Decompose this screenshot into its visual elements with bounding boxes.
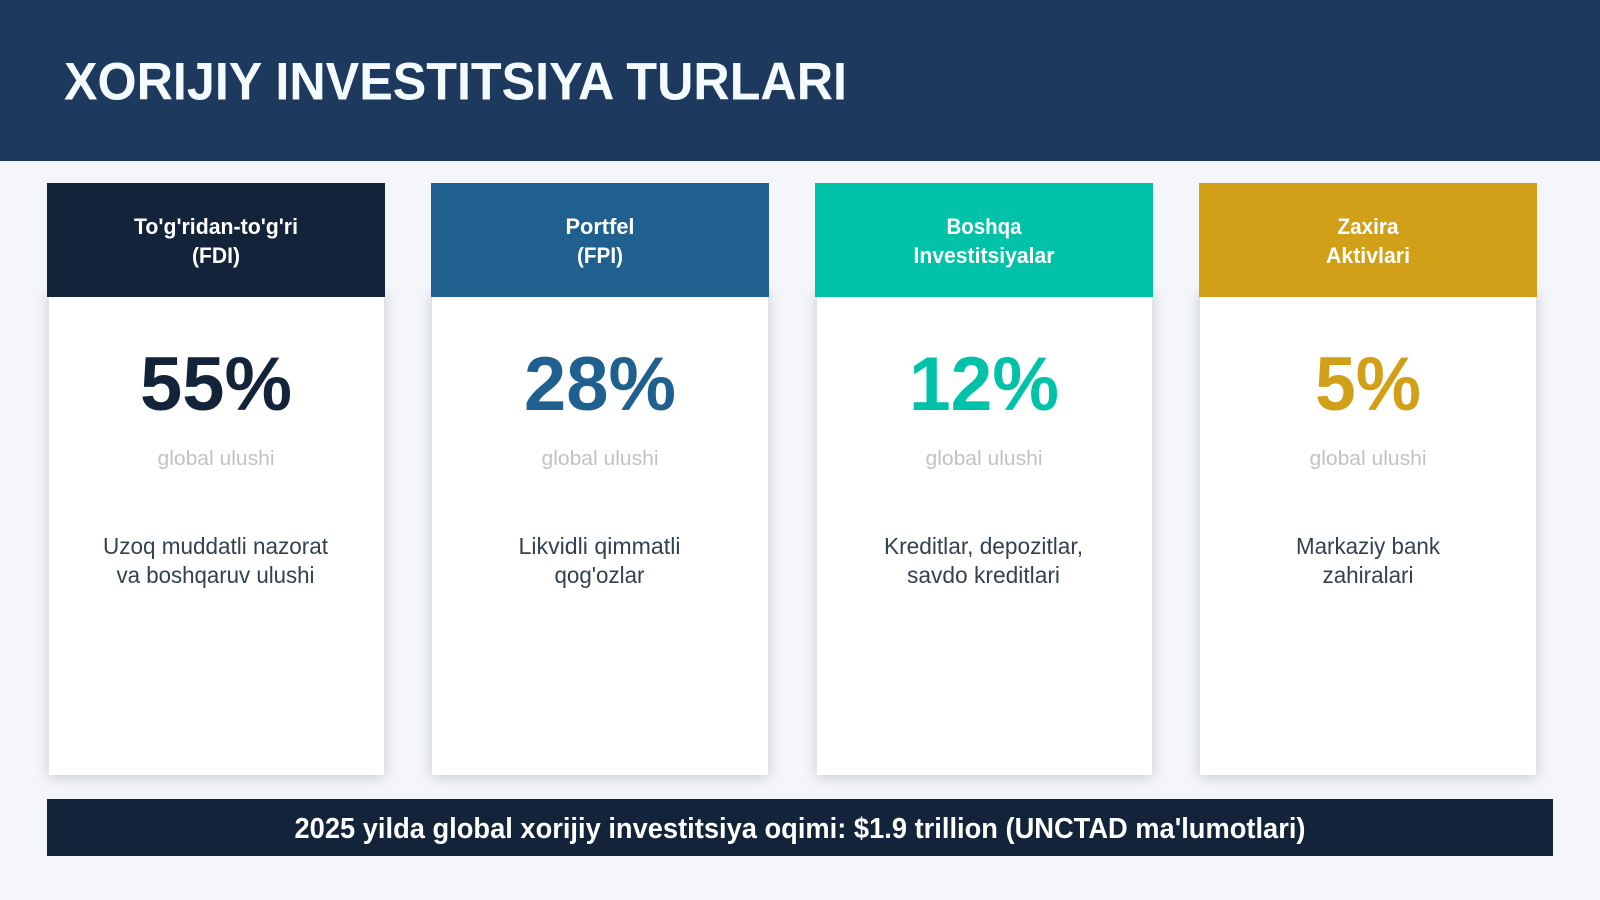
panel: FPI xyxy=(431,183,769,775)
footer banner: 2025 yilda global xorijiy investitsiya oqimi: $1.9 trillion (UNCTAD ma'lumotlari) xyxy=(294,813,1306,845)
panel header: other investments: Boshqa xyxy=(946,214,1022,239)
share caption: global ulushi xyxy=(1310,448,1426,470)
title: XORIJIY INVESTITSIYA TURLARI xyxy=(64,52,847,112)
panel header: other investments xyxy=(815,183,1153,297)
header band xyxy=(0,0,1600,161)
description xyxy=(884,533,1083,588)
panel header: FPI: (FPI) xyxy=(577,243,623,268)
share caption: global ulushi xyxy=(926,448,1042,470)
share caption: global ulushi xyxy=(542,448,658,470)
panel header: FDI xyxy=(47,183,385,297)
description: qog'ozlar xyxy=(554,562,645,588)
description xyxy=(518,533,680,588)
panel: reserve assets xyxy=(1199,183,1537,775)
panel header: other investments: Investitsiyalar xyxy=(914,243,1055,268)
panel header: FDI: To'g'ridan-to'g'ri xyxy=(134,214,298,239)
panel header: reserve assets: Aktivlari xyxy=(1326,243,1410,268)
description xyxy=(1296,533,1440,588)
description: Markaziy bank xyxy=(1296,533,1440,559)
panel: FDI xyxy=(47,183,385,775)
description: savdo kreditlari xyxy=(907,562,1060,588)
description: Kreditlar, depozitlar, xyxy=(884,533,1083,559)
description: Uzoq muddatli nazorat xyxy=(103,533,329,559)
panel header: reserve assets xyxy=(1199,183,1537,297)
description: va boshqaruv ulushi xyxy=(116,562,314,588)
panel header: reserve assets: Zaxira xyxy=(1338,214,1399,239)
share value: 5%: 5% xyxy=(1315,342,1421,427)
description: zahiralari xyxy=(1322,562,1414,588)
panel: other investments xyxy=(815,183,1153,775)
share value: 28%: 28% xyxy=(524,342,676,427)
share value: 12%: 12% xyxy=(909,342,1059,427)
panel header: FPI xyxy=(431,183,769,297)
share value: 55%: 55% xyxy=(140,342,292,427)
description: Likvidli qimmatli xyxy=(518,533,680,559)
panel header: FDI: (FDI) xyxy=(192,243,240,268)
share caption: global ulushi xyxy=(158,448,274,470)
footer banner xyxy=(47,799,1553,856)
panel header: FPI: Portfel xyxy=(566,214,634,239)
description xyxy=(103,533,329,588)
